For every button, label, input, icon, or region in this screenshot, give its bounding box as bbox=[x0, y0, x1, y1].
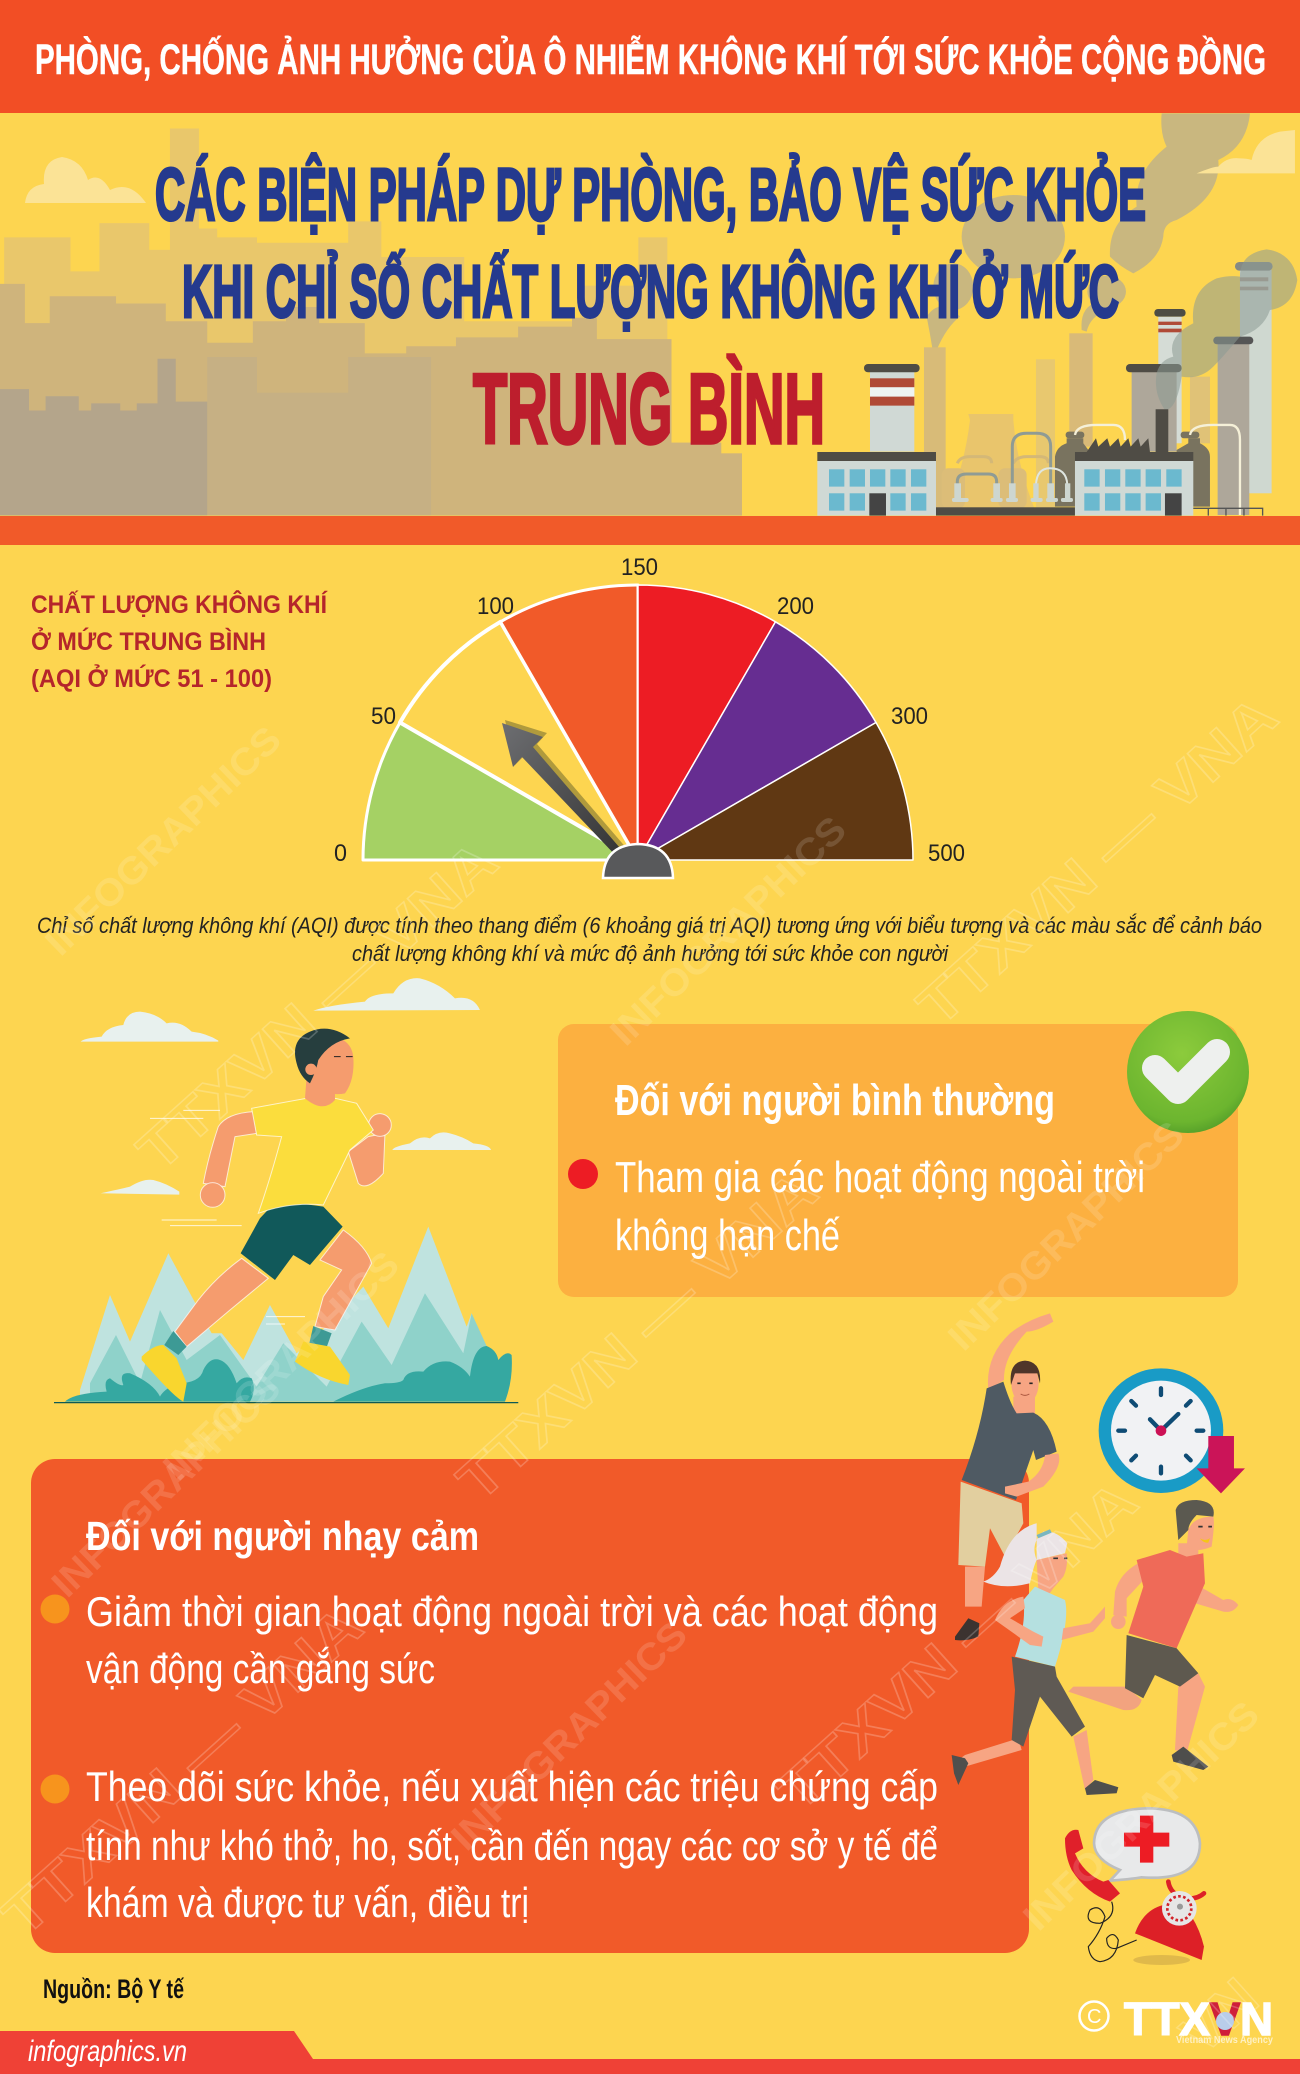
logo: TTXVN: C bbox=[1087, 2006, 1101, 2028]
air quality level label: CHẤT LƯỢNG KHÔNG KHÍ bbox=[31, 589, 328, 619]
watermarks: TTXVN — VNA bbox=[905, 683, 1289, 1038]
running man bbox=[1068, 1500, 1238, 1770]
gauge scale numbers bbox=[334, 554, 965, 867]
banner background: polluted city and factories bbox=[0, 113, 1297, 516]
running woman bbox=[952, 1523, 1118, 1795]
watermarks: INFOGRAPHICS bbox=[444, 1614, 696, 1859]
cloud left bbox=[25, 157, 146, 203]
advice 2: khám và được tư vấn, điều trị bbox=[86, 1879, 529, 1926]
watermarks: INFOGRAPHICS bbox=[156, 1244, 408, 1489]
city skyline bbox=[0, 129, 742, 516]
bullet: red bbox=[568, 1159, 598, 1189]
source: Nguồn: Bộ Y tế bbox=[43, 1974, 185, 2004]
advice: normal people bbox=[615, 1153, 1145, 1260]
icon: green check bbox=[1127, 1011, 1249, 1133]
footer band: infographics.vn bbox=[28, 2035, 187, 2068]
icon: clock bbox=[1099, 1368, 1223, 1493]
advice: normal people: Tham gia các hoạt động ngoài trời bbox=[615, 1153, 1145, 1202]
phone handset, cord and base bbox=[1065, 1830, 1204, 1965]
watermarks: TTXVN — VNA bbox=[125, 828, 509, 1183]
gauge scale numbers: 0 bbox=[334, 840, 347, 867]
speech bubble with red cross bbox=[1094, 1808, 1200, 1881]
advice 2: Theo dõi sức khỏe, nếu xuất hiện các triệu chứng cấp bbox=[86, 1763, 938, 1810]
air quality level label bbox=[31, 589, 328, 693]
gauge hub bbox=[603, 844, 673, 878]
watermarks: TTXVN — VNA bbox=[445, 1158, 829, 1513]
heading: normal people: Đối với người bình thường bbox=[615, 1076, 1055, 1125]
watermarks: INFOGRAPHICS bbox=[603, 809, 855, 1054]
AQI gauge bbox=[334, 554, 965, 878]
bullet 2 bbox=[40, 1774, 70, 1804]
air quality level label: Ở MỨC TRUNG BÌNH bbox=[31, 626, 266, 656]
bottom band of the hero bbox=[0, 516, 1300, 545]
logo: TTXVN: Vietnam News Agency bbox=[1176, 2035, 1273, 2046]
logo: TTXVN: TTXVN bbox=[1124, 1993, 1273, 2045]
watermarks: INFOGRAPHICS bbox=[1016, 1694, 1268, 1939]
advice 1: vận động cần gắng sức bbox=[86, 1645, 435, 1692]
gauge scale numbers: 200 bbox=[777, 593, 814, 620]
segment 301-500 bbox=[638, 722, 913, 860]
gauge scale numbers: 50 bbox=[371, 703, 396, 730]
needle arrow bbox=[502, 720, 628, 858]
segment 101-150 bbox=[500, 585, 638, 860]
main heading: TRUNG BÌNH bbox=[473, 353, 825, 464]
panel: normal people bbox=[558, 1011, 1249, 1297]
icon: down arrow bbox=[1197, 1436, 1245, 1493]
watermarks: VN bbox=[1168, 1965, 1270, 2066]
icon: medical phone call bbox=[1065, 1808, 1204, 1965]
gauge scale numbers: 300 bbox=[891, 703, 928, 730]
man stretching bbox=[955, 1313, 1059, 1640]
advice 2: tính như khó thở, ho, sốt, cần đến ngay các cơ sở y tế để bbox=[86, 1822, 938, 1869]
advice 2 bbox=[86, 1763, 938, 1926]
gauge scale numbers: 500 bbox=[928, 840, 965, 867]
explanatory caption bbox=[37, 913, 1262, 966]
segment 151-200 bbox=[638, 585, 776, 860]
factories bbox=[817, 113, 1297, 516]
watermarks bbox=[0, 683, 1289, 2066]
gauge scale numbers: 150 bbox=[621, 554, 658, 581]
air quality level label: (AQI Ở MỨC 51 - 100) bbox=[31, 663, 272, 693]
panel: sensitive people bbox=[31, 1459, 1029, 1953]
footer band bbox=[0, 2031, 1300, 2074]
heading: sensitive people: Đối với người nhạy cảm bbox=[86, 1513, 479, 1559]
segment 51-100 bbox=[400, 622, 638, 860]
bullet 1 bbox=[40, 1594, 70, 1624]
advice 1 bbox=[86, 1588, 938, 1692]
watermarks: TTXVN — VNA bbox=[765, 1468, 1149, 1823]
top banner bbox=[0, 0, 1300, 113]
illustration: man running in the mountains bbox=[54, 978, 518, 1403]
advice: normal people: không hạn chế bbox=[615, 1211, 840, 1260]
main heading bbox=[155, 153, 1146, 464]
advice 1: Giảm thời gian hoạt động ngoài trời và các hoạt động bbox=[86, 1588, 938, 1635]
watermarks: INFOGRAPHICS bbox=[941, 1114, 1193, 1359]
watermarks: INFOGRAPHICS bbox=[38, 719, 290, 964]
watermarks: INFOGRAPHICS bbox=[44, 1367, 289, 1606]
segment 0-50 bbox=[363, 722, 638, 860]
segment 201-300 bbox=[638, 622, 876, 860]
illustration: exercising people and clock bbox=[952, 1313, 1245, 1795]
gauge scale numbers: 100 bbox=[477, 593, 514, 620]
explanatory caption: chất lượng không khí và mức độ ảnh hưởng tới sức khỏe con người bbox=[352, 941, 949, 966]
